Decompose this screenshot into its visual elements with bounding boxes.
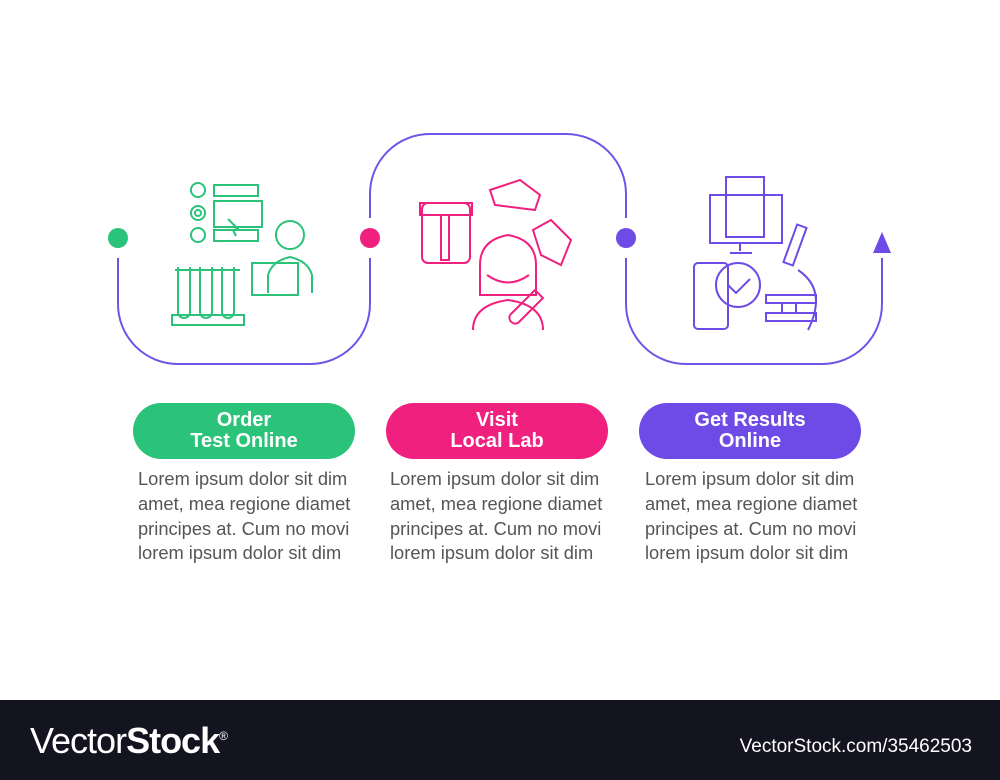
text: step 3: Lorem ipsum dolor sit dim amet, mea regione diamet principes at. Cum no movi lorem ipsum dolor sit dim bbox=[645, 468, 857, 563]
footer logo: VectorStock® bbox=[30, 720, 227, 761]
pill: order test online: Order bbox=[217, 409, 271, 431]
pill: get results online: Online bbox=[719, 430, 781, 452]
pill: order test online: Test Online bbox=[190, 430, 298, 452]
icon: order test online bbox=[171, 182, 313, 326]
footer url: VectorStock.com/35462503 bbox=[740, 736, 972, 757]
pill: get results online bbox=[639, 403, 861, 459]
pill: visit local lab: Visit bbox=[476, 409, 518, 431]
footer bar bbox=[0, 700, 1000, 780]
icon: visit local lab bbox=[419, 178, 572, 330]
pill: visit local lab bbox=[386, 403, 608, 459]
text: step 2: Lorem ipsum dolor sit dim amet, mea regione diamet principes at. Cum no movi lorem ipsum dolor sit dim bbox=[390, 468, 602, 563]
text: step 1: Lorem ipsum dolor sit dim amet, mea regione diamet principes at. Cum no movi lorem ipsum dolor sit dim bbox=[138, 468, 350, 563]
pill: get results online: Get Results bbox=[694, 409, 806, 431]
pill: visit local lab: Local Lab bbox=[450, 430, 544, 452]
pill: order test online bbox=[133, 403, 355, 459]
icon: get results online bbox=[693, 176, 817, 330]
